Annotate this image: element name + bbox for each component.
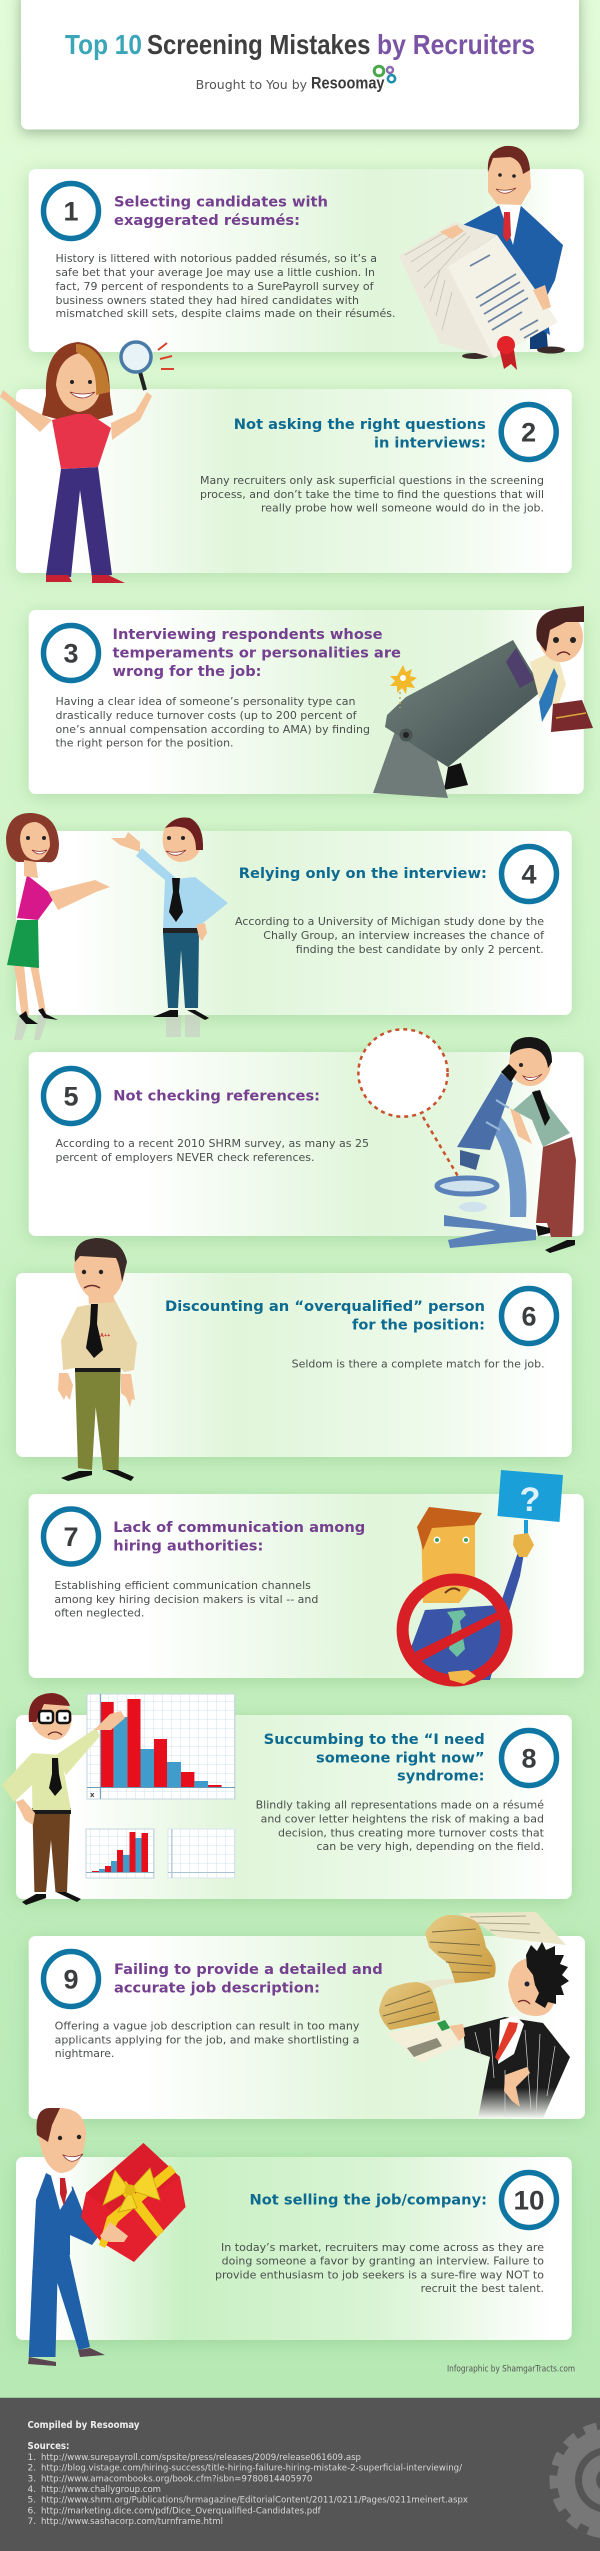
byline: Resoomay — [311, 74, 385, 93]
sources list: http://www.amacombooks.org/book.cfm?isbn=9780814405970 — [41, 2474, 313, 2484]
number badge 5 — [44, 1068, 98, 1124]
number badge 5: 5 — [63, 1082, 79, 1112]
number badge 10: 10 — [514, 2186, 544, 2216]
body text 10 — [215, 2241, 544, 2295]
body text 10: provide enthusiasm to job seekers is a sure-fire way NOT to — [215, 2268, 544, 2281]
sources list: 4. — [28, 2485, 36, 2495]
panel 10 — [16, 2108, 572, 2366]
body text 1: safe bet that your average Joe may use a little cushion. In — [56, 266, 375, 279]
illustration: overqualified man — [58, 1238, 137, 1481]
body text 2: Many recruiters only ask superficial questions in the screening — [200, 474, 544, 487]
panel 8 — [2, 1693, 572, 1905]
body text 2: really probe how well someone would do in the job. — [261, 502, 544, 515]
illustration: man with gift — [28, 2108, 186, 2366]
body text 5 — [56, 1137, 369, 1164]
illustration: man with huge resume — [399, 146, 565, 370]
sources list: Sources: — [28, 2441, 70, 2452]
icon: gear — [554, 2426, 600, 2534]
number badge 7 — [44, 1509, 98, 1564]
body text 3: one’s annual compensation according to AMA) by finding — [56, 723, 370, 736]
heading 8 — [264, 1732, 485, 1785]
body text 10: doing someone a favor by granting an interview. Failure to — [222, 2255, 544, 2268]
sources list: 5. — [28, 2496, 36, 2506]
title: Screening Mistakes — [147, 29, 370, 60]
title: by Recruiters — [377, 29, 535, 60]
heading 7: Lack of communication among — [113, 1520, 365, 1536]
heading 9: accurate job description: — [114, 1980, 320, 1996]
number badge 9: 9 — [63, 1964, 79, 1994]
body text 7: often neglected. — [54, 1607, 144, 1620]
heading 1 — [114, 195, 328, 229]
credit line: Infographic by ShamgarTracts.com — [447, 2365, 575, 2375]
header panel — [21, 0, 579, 130]
heading 8: syndrome: — [397, 1769, 484, 1785]
body text 4 — [235, 915, 545, 956]
byline: Brought to You by — [196, 78, 307, 92]
body text 9: applicants applying for the job, and make shortlisting a — [55, 2034, 359, 2047]
heading 4: Relying only on the interview: — [239, 866, 487, 882]
chart: large bar chart — [87, 1694, 235, 1799]
panel 1 — [29, 146, 584, 370]
illustration: man with question sign: ? — [520, 1481, 540, 1519]
heading 7: hiring authorities: — [113, 1539, 263, 1555]
sources list: http://www.surepayroll.com/spsite/press/releases/2009/release061609.asp — [41, 2453, 361, 2463]
number badge 4: 4 — [521, 860, 537, 890]
title: Top 10 — [65, 29, 142, 60]
heading 6 — [165, 1299, 485, 1334]
body text 4: According to a University of Michigan study done by the — [235, 915, 544, 928]
body text 8: decision, thus creating more turnover costs that — [278, 1826, 545, 1839]
heading 3: temperaments or personalities are — [112, 646, 401, 662]
body text 1: fact, 79 percent of respondents to a SurePayroll survey of — [56, 280, 375, 293]
sources list: 1. — [28, 2453, 36, 2463]
compiled by: Compiled by Resoomay — [28, 2420, 140, 2431]
body text 2: process, and don’t take the time to find the questions that will — [200, 488, 544, 501]
body text 8: can be very high, depending on the field. — [316, 1840, 544, 1853]
number badge 9 — [44, 1952, 98, 2006]
illustration: man gesturing — [111, 817, 228, 1037]
body text 1: mismatched skill sets, despite claims made on their résumés. — [56, 307, 396, 320]
body text 9: nightmare. — [55, 2047, 114, 2060]
body text 3: the right person for the position. — [56, 737, 234, 750]
sources list: 3. — [28, 2474, 36, 2484]
heading 8: someone right now” — [316, 1750, 484, 1766]
body text 2 — [200, 474, 544, 515]
number badge 7: 7 — [63, 1522, 79, 1552]
heading 10: Not selling the job/company: — [250, 2192, 487, 2208]
body text 4: finding the best candidate by only 2 percent. — [296, 943, 544, 956]
body text 1: business owners stated they had hired candidates with — [56, 294, 359, 307]
body text 8: Blindly taking all representations made on a résumé — [256, 1799, 544, 1812]
body text 4: Chally Group, an interview increases the chance of — [263, 929, 545, 942]
sources list: http://www.shrm.org/Publications/hrmagazine/EditorialContent/2011/0211/Pages/0211meinert.aspx — [41, 2496, 469, 2506]
heading 9 — [114, 1962, 383, 1996]
sources list: http://www.challygroup.com — [41, 2485, 161, 2495]
body text 5: percent of employers NEVER check references. — [56, 1151, 314, 1164]
heading 9: Failing to provide a detailed and — [114, 1962, 383, 1978]
body text 9: Offering a vague job description can result in too many — [55, 2020, 360, 2033]
illustration: woman talking — [6, 813, 110, 1040]
illustration: man at microscope — [437, 1037, 576, 1253]
body text 7 — [54, 1579, 318, 1620]
number badge 3: 3 — [63, 638, 79, 668]
number badge 1: 1 — [63, 196, 79, 226]
number badge 10 — [502, 2172, 556, 2228]
panel 7 — [29, 1470, 584, 1684]
illustration: man with glasses — [2, 1693, 125, 1905]
number badge 8 — [502, 1730, 556, 1786]
heading 6: for the position: — [352, 1318, 485, 1334]
byline — [196, 74, 385, 93]
sources list: 6. — [28, 2506, 36, 2516]
panel 9 — [29, 1912, 585, 2119]
body text 3 — [56, 695, 370, 750]
panel 3 — [29, 606, 593, 798]
body text 3: Having a clear idea of someone’s personality type can — [56, 695, 356, 708]
body text 10: recruit the best talent. — [421, 2282, 544, 2295]
body text 8: and cover letter heightens the risk of making a bad — [261, 1813, 544, 1826]
sources list: 2. — [28, 2464, 36, 2474]
heading 2: Not asking the right questions — [234, 417, 486, 433]
illustration: overqualified man: A++ — [100, 1333, 110, 1339]
sources list: http://blog.vistage.com/hiring-success/title-hiring-failure-hiring-mistake-2-superficial-interviewing/ — [41, 2464, 463, 2474]
illustration: man with question sign — [403, 1470, 563, 1684]
sources list: http://www.sashacorp.com/turnframe.html — [41, 2517, 223, 2527]
body text 5: According to a recent 2010 SHRM survey, as many as 25 — [56, 1137, 369, 1150]
chart: small bar chart — [86, 1829, 154, 1878]
icon: logo gears — [374, 66, 395, 82]
heading 1: exaggerated résumés: — [114, 213, 300, 229]
body text 10: In today’s market, recruiters may come across as they are — [221, 2241, 544, 2254]
illustration: man in cannon — [373, 606, 593, 798]
number badge 6: 6 — [521, 1302, 537, 1332]
number badge 2: 2 — [521, 418, 536, 448]
body text 9 — [55, 2020, 360, 2060]
number badge 2 — [501, 404, 556, 460]
illustration: woman with magnifier — [0, 342, 174, 583]
body text 7: Establishing efficient communication channels — [54, 1579, 311, 1592]
panel 5 — [29, 1029, 584, 1253]
body text 1 — [56, 252, 396, 320]
panel 2 — [0, 342, 572, 583]
title — [65, 29, 535, 60]
panel 4 — [6, 813, 572, 1040]
body text 6: Seldom is there a complete match for the job. — [292, 1358, 545, 1371]
body text 1: History is littered with notorious padded résumés, so it’s a — [56, 252, 377, 265]
heading 3 — [112, 627, 401, 680]
panel 6 — [16, 1238, 572, 1481]
heading 3: wrong for the job: — [112, 664, 262, 680]
number badge 3 — [44, 626, 98, 680]
heading 1: Selecting candidates with — [114, 195, 328, 211]
illustration: man with job description paper — [379, 1912, 570, 2118]
heading 5: Not checking references: — [113, 1089, 320, 1105]
sources list — [28, 2441, 469, 2527]
heading 3: Interviewing respondents whose — [112, 627, 383, 643]
footer panel — [0, 2398, 600, 2551]
heading 2: in interviews: — [374, 436, 486, 452]
heading 6: Discounting an “overqualified” person — [165, 1299, 485, 1315]
sources list: http://marketing.dice.com/pdf/Dice_Overqualified-Candidates.pdf — [41, 2506, 321, 2516]
body text 8 — [256, 1799, 545, 1853]
number badge 4 — [502, 846, 556, 902]
dotted magnification circle — [358, 1029, 459, 1178]
heading 8: Succumbing to the “I need — [264, 1732, 485, 1748]
body text 7: among key hiring decision makers is vital -- and — [54, 1593, 318, 1606]
chart: large bar chart: x — [90, 1791, 95, 1799]
number badge 8: 8 — [521, 1744, 537, 1774]
number badge 6 — [502, 1288, 556, 1344]
heading 2 — [234, 417, 486, 452]
body text 3: drastically reduce turnover costs (up to 200 percent of — [56, 709, 358, 722]
chart: empty grid — [168, 1829, 235, 1878]
heading 7 — [113, 1520, 365, 1555]
sources list: 7. — [28, 2517, 36, 2527]
number badge 1 — [44, 184, 98, 238]
